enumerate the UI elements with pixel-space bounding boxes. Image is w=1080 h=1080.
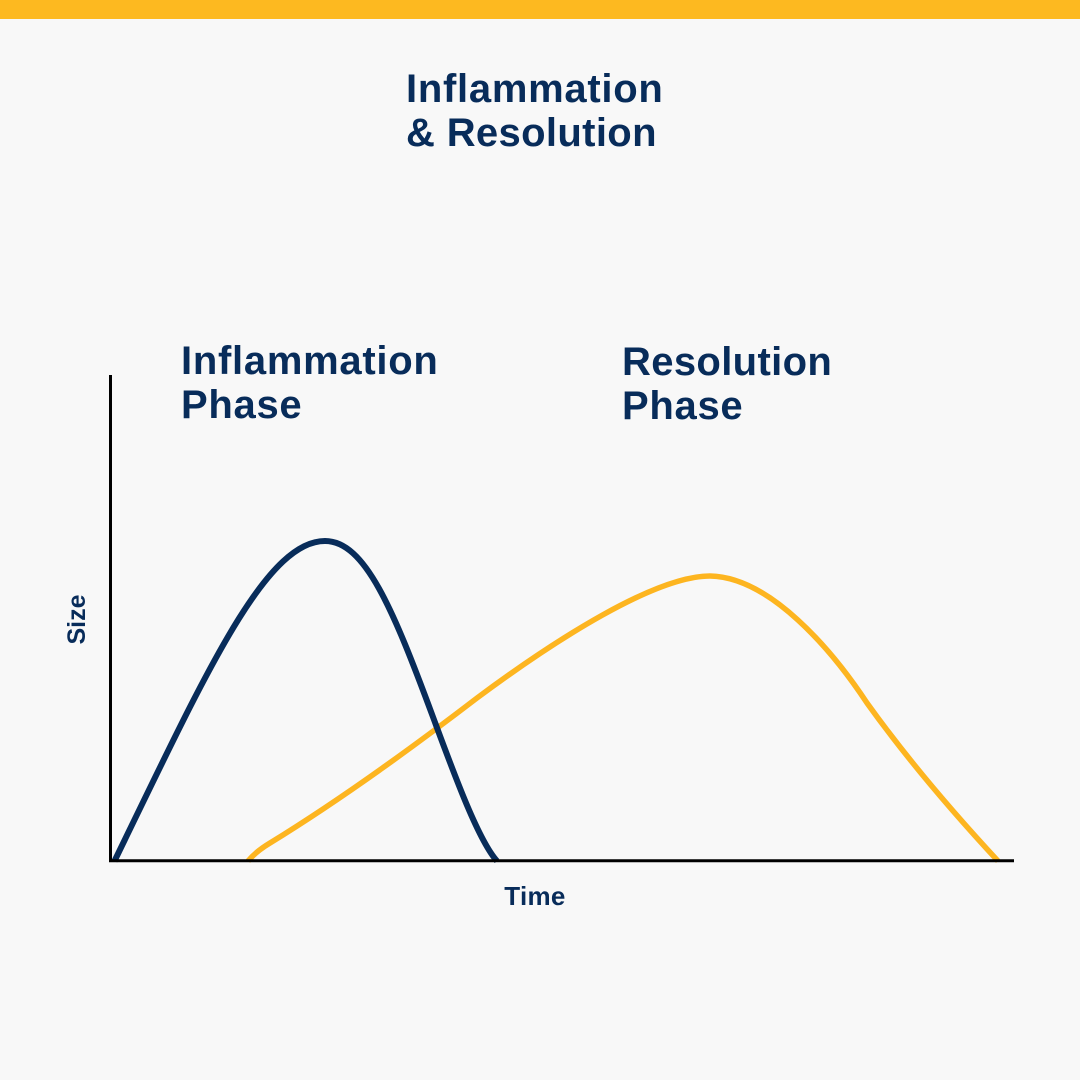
inflammation curve bbox=[114, 541, 497, 861]
heading: resolution phase bbox=[622, 340, 832, 428]
title bbox=[406, 67, 664, 155]
chart axes bbox=[109, 375, 1014, 862]
heading: resolution phase: Phase bbox=[622, 384, 743, 428]
title: Inflammation bbox=[406, 67, 664, 111]
resolution curve bbox=[248, 576, 998, 861]
heading: inflammation phase bbox=[181, 339, 439, 427]
heading: resolution phase: Resolution bbox=[622, 340, 832, 384]
heading: inflammation phase: Phase bbox=[181, 383, 302, 427]
top accent bar bbox=[0, 0, 1080, 19]
y axis label: Size bbox=[63, 594, 91, 645]
title: & Resolution bbox=[406, 111, 657, 155]
x axis label: Time bbox=[504, 881, 566, 911]
heading: inflammation phase: Inflammation bbox=[181, 339, 439, 383]
